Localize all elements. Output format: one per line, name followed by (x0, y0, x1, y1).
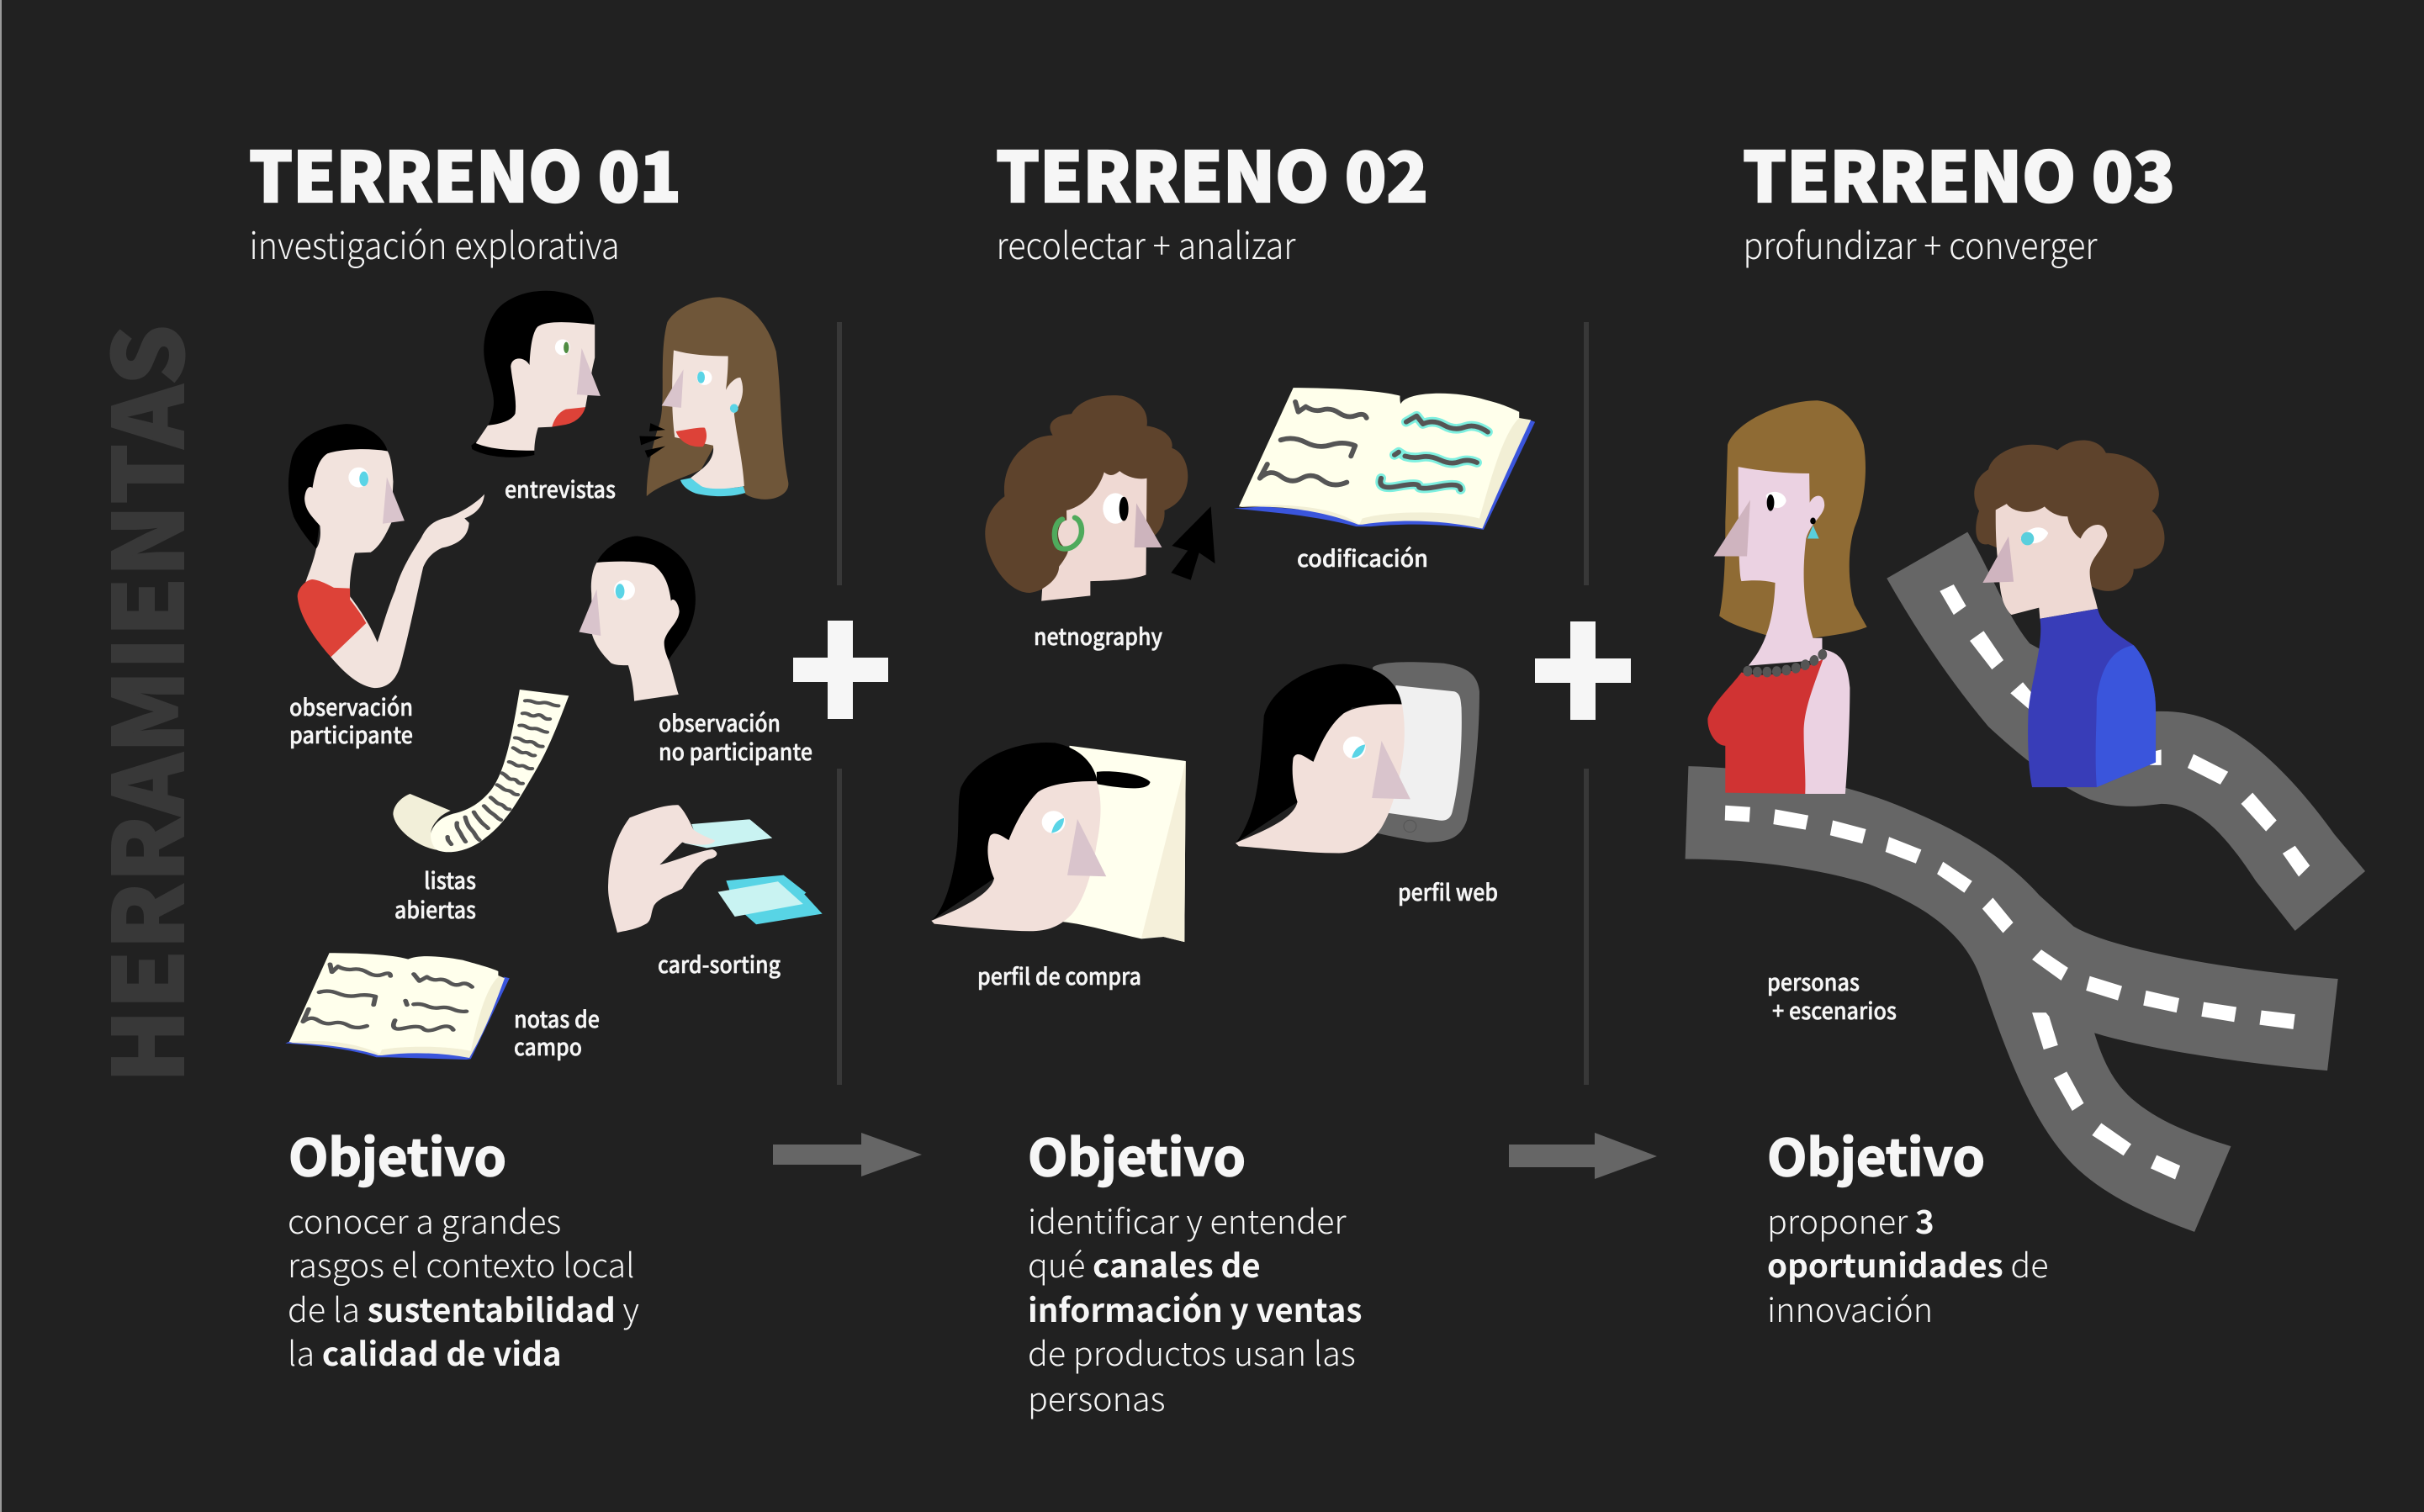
label: listas abiertas: abiertas (394, 892, 476, 925)
person: top interviewer (471, 291, 601, 457)
label: observación no participante: no participante (659, 734, 812, 767)
label: observación no participante: observación (659, 706, 781, 738)
objective block 1 (288, 1118, 639, 1376)
illustration: personas and scenario roads (1686, 400, 2365, 1232)
label: card-sorting: card-sorting (658, 947, 781, 980)
icon: coded book with highlighted text (1234, 388, 1535, 530)
objective block 2: qué canales de (1028, 1240, 1261, 1287)
label: observación participante (289, 690, 413, 750)
person: pointing observer (288, 424, 484, 688)
arrow 1 (773, 1133, 922, 1176)
label: notas de campo: campo (514, 1029, 582, 1062)
person: curly-haired netnographer with cursor (985, 395, 1215, 601)
objective block 2: de productos usan las (1028, 1328, 1356, 1376)
label: netnography: netnography (1034, 619, 1162, 652)
heading: TERRENO 02: recolectar + analizar (996, 216, 1296, 270)
person: web profile with tablet (1236, 662, 1479, 853)
label: listas abiertas (394, 863, 476, 925)
objective block 1: de la sustentabilidad y (288, 1284, 639, 1332)
objective block 2: Objetivo (1028, 1118, 1246, 1191)
label: observación participante: participante (289, 717, 413, 750)
arrow 2 (1509, 1133, 1657, 1179)
label: notas de campo: notas de (514, 1002, 600, 1034)
person: shopping-bag profile (931, 743, 1186, 942)
road: forking main road (1686, 766, 2338, 1232)
label: observación participante: observación (289, 690, 413, 722)
objective block 3: Objetivo (1767, 1118, 1985, 1191)
label: notas de campo (514, 1002, 600, 1062)
objective block 2 (1028, 1118, 1362, 1421)
icon: hand sorting cards (608, 805, 823, 933)
label: observación no participante (659, 706, 812, 767)
heading: TERRENO 02 (996, 122, 1428, 270)
road: upper scenario (1887, 532, 2365, 931)
illustration: netnography and coding (931, 388, 1535, 942)
vertical title: HERRAMIENTAS: HERRAMIENTAS (72, 325, 211, 1083)
objective block 1: rasgos el contexto local (288, 1240, 635, 1287)
person: brown-haired woman talking (639, 297, 788, 500)
objective block 3: innovación (1767, 1284, 1933, 1332)
label: personas + escenarios: personas (1767, 965, 1860, 997)
person: woman in red dress (1707, 400, 1867, 794)
objective block 1: Objetivo (288, 1118, 506, 1191)
label: listas abiertas: listas (424, 863, 476, 896)
heading: TERRENO 03 (1743, 122, 2175, 270)
objective block 2: personas (1028, 1373, 1166, 1421)
illustration: entrevistas people (288, 291, 788, 701)
heading: TERRENO 01: investigación explorativa (249, 216, 619, 270)
objective block 1: la calidad de vida (288, 1328, 562, 1376)
heading: TERRENO 02: TERRENO 02 (996, 122, 1428, 222)
heading: TERRENO 03: profundizar + converger (1743, 216, 2098, 270)
icon: open field-notes book (285, 953, 510, 1060)
icon: open list scroll (393, 690, 569, 852)
label: perfil web: perfil web (1398, 875, 1498, 907)
person: curly-haired man in blue (1974, 440, 2164, 787)
person: silent observer (579, 536, 696, 701)
heading: TERRENO 03: TERRENO 03 (1743, 122, 2175, 222)
objective block 3: oportunidades de (1767, 1240, 2049, 1287)
label: codificación: codificación (1297, 541, 1428, 574)
label: perfil de compra: perfil de compra (977, 959, 1141, 991)
column divider and plus 1 (793, 322, 888, 1085)
heading: TERRENO 01 (249, 122, 681, 270)
heading: TERRENO 01: TERRENO 01 (249, 122, 681, 222)
objective block 1: conocer a grandes (288, 1196, 561, 1244)
objective block 2: identificar y entender (1028, 1196, 1347, 1244)
objective block 3: proponer 3 (1767, 1196, 1934, 1244)
objective block 2: información y ventas (1028, 1285, 1362, 1332)
label: entrevistas: entrevistas (505, 472, 616, 505)
column divider and plus 2 (1535, 322, 1631, 1085)
objective block 3 (1767, 1118, 2049, 1332)
illustration: scroll, cards and field notes (285, 690, 823, 1060)
label: personas + escenarios: + escenarios (1772, 993, 1897, 1026)
label: personas + escenarios (1767, 965, 1897, 1026)
